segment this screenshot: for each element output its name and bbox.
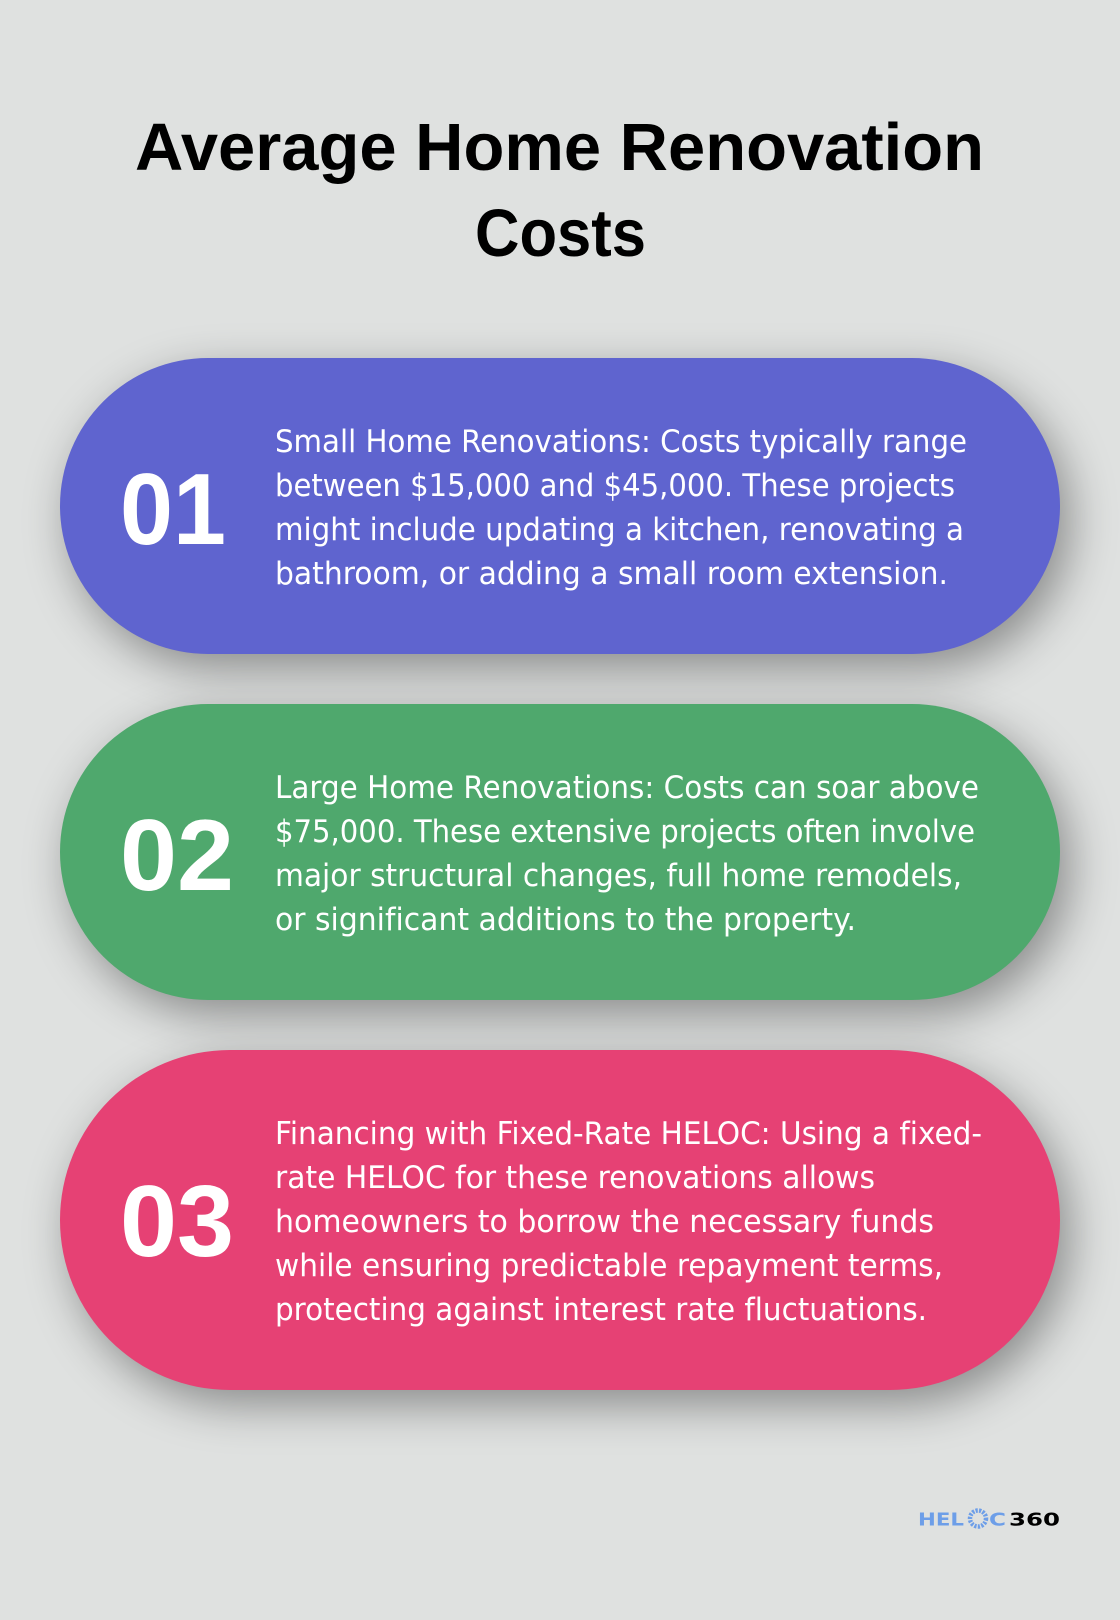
text block: financing with fixed-rate HELOC: Financing with Fixed-Rate HELOC: Using a fixed-	[275, 1116, 982, 1152]
text block: financing with fixed-rate HELOC: rate HELOC for these renovations allows	[275, 1160, 875, 1196]
text block: small home renovations: Small Home Renovations: Costs typically range	[275, 424, 967, 460]
number 02: 02	[120, 800, 234, 912]
text block: small home renovations: between $15,000 and $45,000. These projects	[275, 468, 955, 504]
title: Average Home Renovation	[135, 110, 984, 185]
logo: HELOC360: HEL	[918, 1510, 964, 1530]
title	[135, 110, 984, 271]
logo: HELOC360	[918, 1510, 1060, 1530]
text block: small home renovations: bathroom, or adding a small room extension.	[275, 556, 948, 592]
text block: large home renovations: major structural changes, full home remodels,	[275, 858, 962, 894]
text block: small home renovations: might include updating a kitchen, renovating a	[275, 512, 964, 548]
text block: financing with fixed-rate HELOC: protecting against interest rate fluctuations.	[275, 1292, 927, 1328]
text block: large home renovations	[275, 770, 979, 938]
number 03: 03	[120, 1166, 234, 1278]
logo: HELOC360: C	[989, 1510, 1006, 1530]
panel: large renovations pill background	[60, 704, 1060, 1000]
text block: financing with fixed-rate HELOC	[275, 1116, 982, 1328]
number 01: 01	[120, 454, 226, 566]
text block: large home renovations: $75,000. These extensive projects often involve	[275, 814, 975, 850]
text block: large home renovations: or significant additions to the property.	[275, 902, 856, 938]
text block: large home renovations: Large Home Renovations: Costs can soar above	[275, 770, 979, 806]
logo: HELOC360: 360	[1009, 1510, 1060, 1530]
panel: small renovations pill background	[60, 358, 1060, 654]
title: Costs	[475, 196, 646, 271]
panel: fixed-rate HELOC pill background	[60, 1050, 1060, 1390]
text block: small home renovations	[275, 424, 967, 592]
icon: swirl O	[970, 1510, 986, 1526]
text block: financing with fixed-rate HELOC: homeowners to borrow the necessary funds	[275, 1204, 934, 1240]
text block: financing with fixed-rate HELOC: while ensuring predictable repayment terms,	[275, 1248, 943, 1284]
